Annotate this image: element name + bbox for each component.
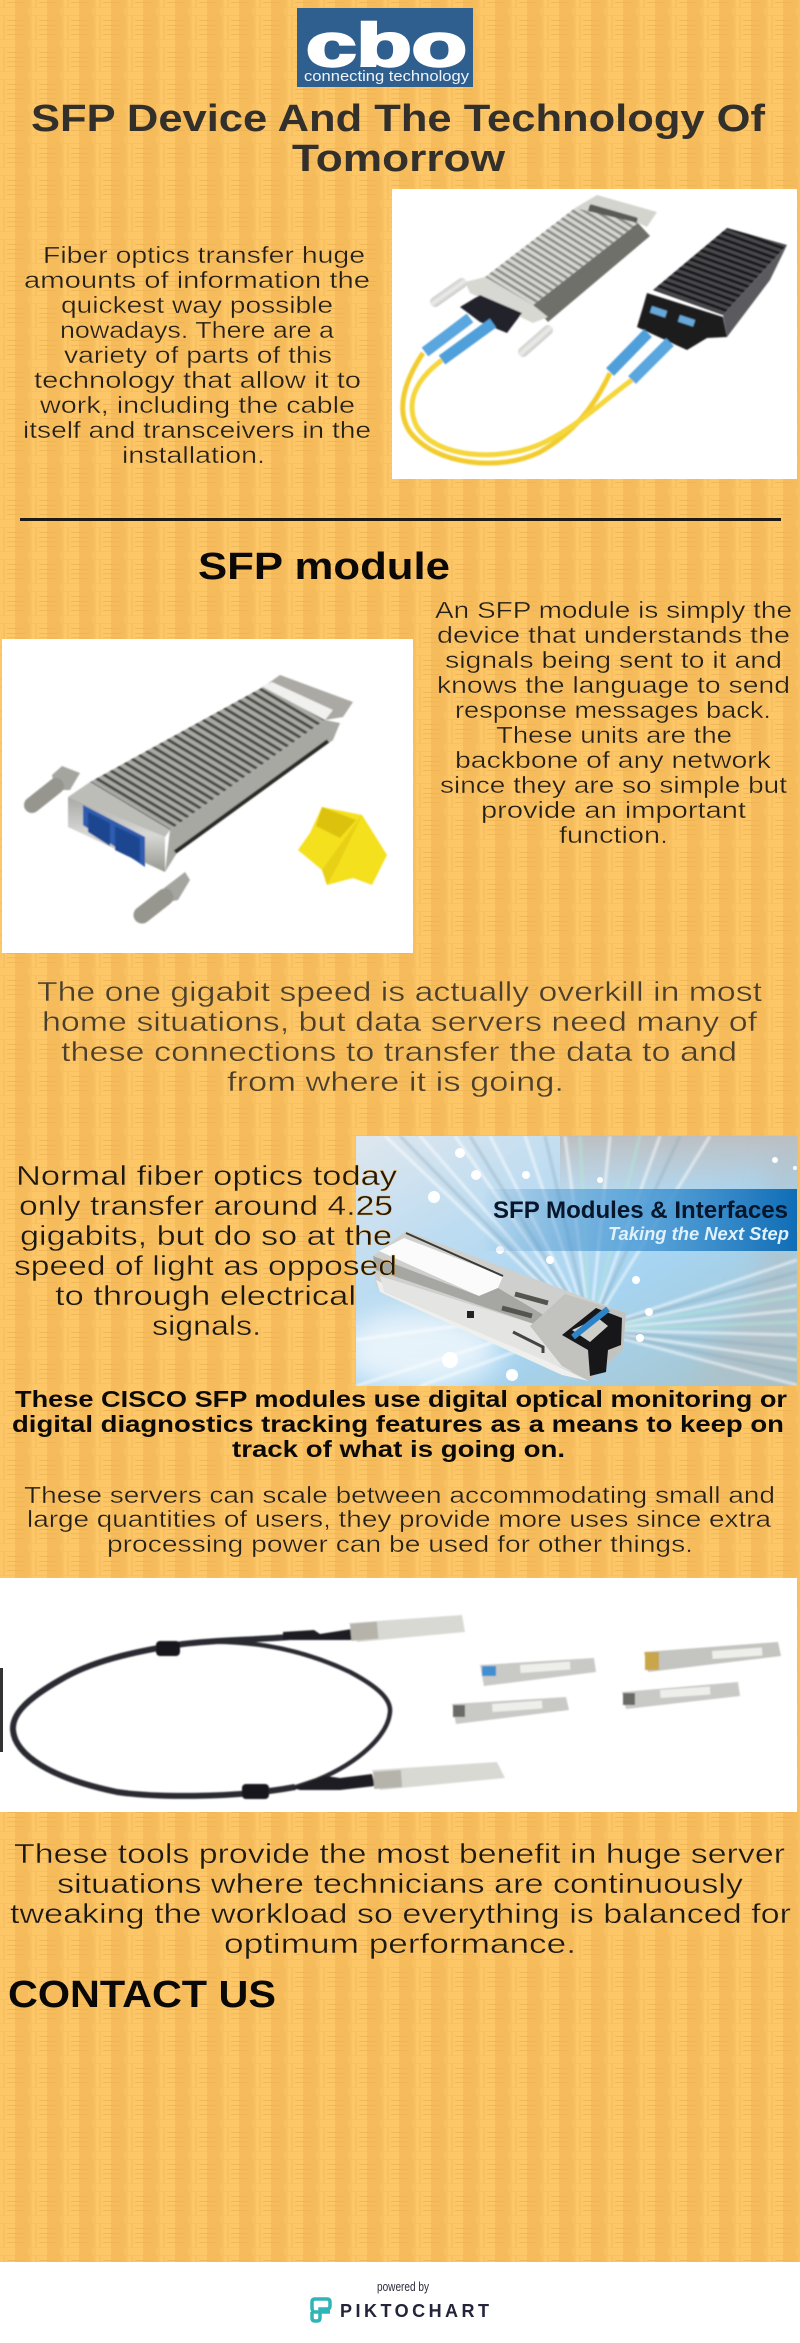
black cable loop	[13, 1637, 295, 1796]
SFP module description: device that understands the	[437, 622, 790, 648]
heading: CONTACT US: CONTACT US	[8, 1974, 276, 2016]
black module	[653, 228, 787, 315]
intro text block: itself and transceivers in the	[23, 417, 371, 443]
photo: two transceivers joined by yellow fiber cable	[392, 189, 797, 479]
gigabit speed text block: from where it is going.	[227, 1066, 564, 1097]
tools benefit text block: optimum performance.	[224, 1928, 576, 1959]
bold CISCO SFP statement	[12, 1386, 787, 1462]
fiber optics speed text block: only transfer around 4.25	[19, 1190, 393, 1221]
heat sink	[90, 687, 325, 830]
fiber optics speed text block: gigabits, but do so at the	[20, 1220, 392, 1251]
intro text block: nowadays. There are a	[60, 317, 334, 343]
silver pins	[435, 283, 462, 302]
SFP module description: since they are so simple but	[440, 772, 788, 798]
yellow cap	[298, 807, 387, 885]
bold CISCO SFP statement: track of what is going on.	[232, 1436, 565, 1462]
fiber optics speed text block: speed of light as opposed	[14, 1250, 397, 1281]
intro text block: technology that allow it to	[34, 367, 361, 393]
tools benefit text block: tweaking the workload so everything is balanced for	[10, 1898, 791, 1929]
gigabit speed text block: home situations, but data servers need many of	[42, 1006, 757, 1037]
blue ports	[83, 805, 145, 867]
bold CISCO SFP statement: digital diagnostics tracking features as a means to keep on	[12, 1411, 784, 1437]
back tab and label	[263, 675, 353, 720]
SFP module description: These units are the	[496, 722, 732, 748]
fiber optics speed text block	[14, 1160, 397, 1341]
Piktochart icon	[312, 2299, 330, 2321]
blue band	[483, 1189, 797, 1251]
blue boots	[425, 318, 470, 352]
silver module	[533, 223, 650, 322]
servers scaling text block: These servers can scale between accommodating small and	[24, 1482, 775, 1508]
servers scaling text block: processing power can be used for other things.	[107, 1531, 693, 1557]
title	[31, 98, 765, 180]
divider line	[20, 518, 781, 521]
title: SFP Device And The Technology Of	[31, 98, 765, 140]
sparkle dots	[428, 1148, 797, 1381]
black connector	[460, 295, 522, 333]
SFP module description: An SFP module is simply the	[435, 597, 792, 623]
banner title: SFP Modules & Interfaces	[493, 1197, 788, 1224]
screw 1	[52, 766, 80, 790]
powered by label: powered by	[377, 2279, 429, 2294]
tools benefit text block	[10, 1838, 791, 1959]
yellow cables	[403, 353, 610, 463]
photo: direct-attach cable and SFP modules	[0, 1578, 797, 1812]
SFP module description	[435, 597, 792, 848]
body side	[165, 720, 340, 872]
SFP module description: knows the language to send	[437, 672, 790, 698]
intro text block: Fiber optics transfer huge	[43, 242, 365, 268]
photo banner: SFP Modules & Interfaces	[340, 1136, 797, 1390]
servers scaling text block	[24, 1482, 775, 1557]
logo: cbo connecting technology	[297, 8, 473, 87]
blue latch	[573, 1309, 608, 1337]
SFP module	[373, 1231, 626, 1381]
fiber optics speed text block: to through electrical	[55, 1280, 356, 1311]
gigabit speed text block: these connections to transfer the data to and	[61, 1036, 737, 1067]
banner subtitle: Taking the Next Step	[608, 1224, 789, 1244]
fiber rays	[356, 1136, 797, 1386]
small SFP modules	[480, 1658, 596, 1686]
SFP module description: response messages back.	[455, 697, 771, 723]
Piktochart wordmark: PIKTOCHART	[340, 2301, 489, 2321]
intro text block: quickest way possible	[61, 292, 333, 318]
tools benefit text block: situations where technicians are continuously	[57, 1868, 743, 1899]
fiber optics speed text block: Normal fiber optics today	[16, 1160, 397, 1191]
screw 2	[164, 872, 190, 902]
intro text block	[23, 242, 371, 468]
photo: XENPAK module with yellow dust cap	[2, 639, 413, 953]
intro text block: amounts of information the	[24, 267, 370, 293]
tools benefit text block: These tools provide the most benefit in huge server	[14, 1838, 785, 1869]
front face	[68, 782, 170, 837]
servers scaling text block: large quantities of users, they provide more uses since extra	[27, 1506, 771, 1532]
intro text block: installation.	[122, 442, 265, 468]
lower cable connector	[293, 1774, 375, 1790]
logo: cbo connecting technology: connecting technology	[304, 68, 470, 85]
fiber optics speed text block: signals.	[152, 1310, 261, 1341]
SFP module description: signals being sent to it and	[445, 647, 782, 673]
logo: cbo connecting technology: cbo	[306, 12, 467, 79]
ports	[562, 1308, 622, 1376]
SFP module description: function.	[559, 822, 668, 848]
intro text block: work, including the cable	[39, 392, 355, 418]
gigabit speed text block	[37, 976, 762, 1097]
heading: SFP module: SFP module	[198, 546, 450, 588]
SFP module description: backbone of any network	[455, 747, 772, 773]
footer: powered by Piktochart	[0, 2262, 800, 2343]
upper cable connector	[283, 1629, 354, 1640]
bold CISCO SFP statement: These CISCO SFP modules use digital optical monitoring or	[15, 1386, 787, 1412]
intro text block: variety of parts of this	[64, 342, 332, 368]
latch slots	[502, 1294, 548, 1316]
title: Tomorrow	[292, 138, 506, 180]
gigabit speed text block: The one gigabit speed is actually overkill in most	[37, 976, 762, 1007]
SFP module description: provide an important	[481, 797, 747, 823]
